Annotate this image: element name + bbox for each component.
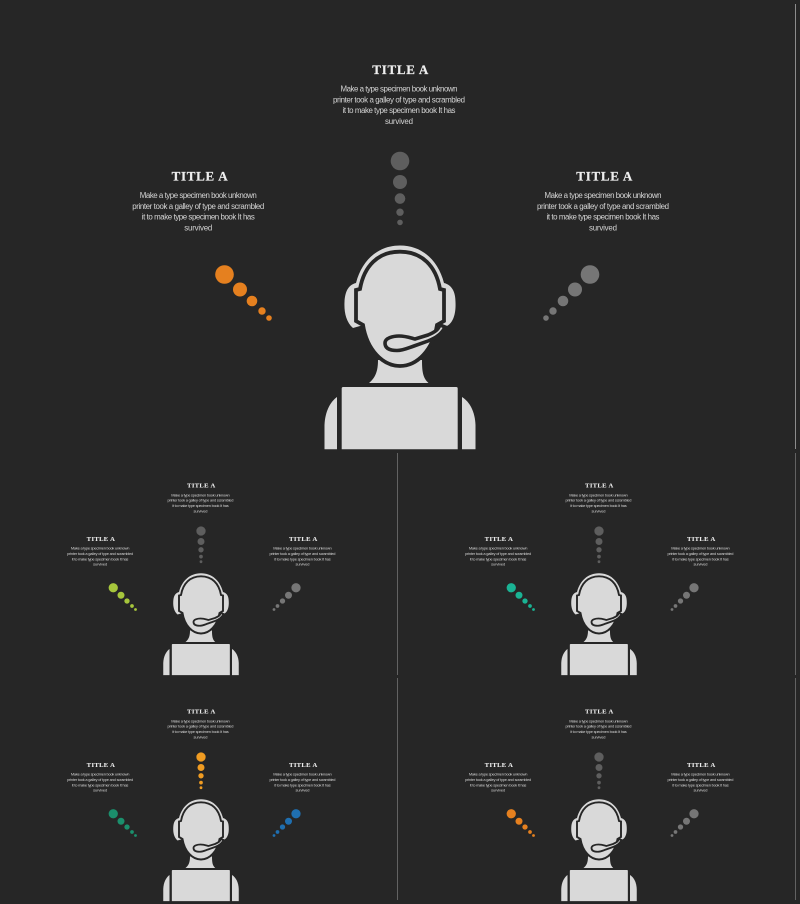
callout: left: printer took a galley of type and scrambled — [132, 202, 264, 211]
callout: top: TITLE A — [585, 708, 613, 716]
callout: top: printer took a galley of type and scrambled — [333, 95, 465, 104]
callout: top: survived — [194, 508, 208, 513]
callout: top: it to make type specimen book It has — [570, 729, 627, 734]
callout: top: Make a type specimen book unknown — [171, 492, 230, 497]
callout: right: TITLE A — [687, 762, 715, 769]
callout: right: it to make type specimen book It has — [274, 782, 331, 787]
callout: top — [566, 708, 632, 739]
callout: top — [168, 708, 234, 739]
callout: right: survived — [589, 224, 617, 232]
panel: main scene — [132, 62, 669, 449]
callout: right: TITLE A — [289, 762, 317, 769]
callout: top: TITLE A — [187, 482, 215, 490]
callout: top: it to make type specimen book It has — [172, 729, 229, 734]
callout: top: printer took a galley of type and scrambled — [566, 724, 632, 729]
dots: right grey — [671, 809, 699, 837]
callout: top: TITLE A — [372, 62, 429, 77]
callout: right: printer took a galley of type and scrambled — [537, 202, 669, 211]
dots: right grey — [671, 583, 699, 611]
callout: right: Make a type specimen book unknown — [544, 191, 662, 200]
dots: right grey — [273, 583, 301, 611]
icon: agent with headset — [324, 246, 476, 449]
panel: scene orange — [465, 708, 734, 901]
callout: top — [333, 62, 465, 126]
callout: top: printer took a galley of type and scrambled — [168, 724, 234, 729]
callout: right: survived — [694, 562, 708, 567]
callout: top: survived — [385, 117, 413, 126]
callout: left: TITLE A — [485, 536, 513, 543]
callout: top — [168, 482, 234, 513]
callout: right: it to make type specimen book It has — [672, 782, 729, 787]
callout: right: survived — [694, 788, 708, 793]
callout: left: survived — [93, 788, 107, 793]
callout: left: Make a type specimen book unknown — [71, 772, 129, 777]
dots: left orange — [507, 809, 535, 837]
callout: right — [668, 762, 734, 793]
callout: right: printer took a galley of type and scrambled — [668, 551, 734, 556]
callout: right: TITLE A — [687, 536, 715, 543]
panel: scene multicolour — [67, 708, 336, 901]
callout: top: TITLE A — [585, 482, 613, 490]
callout: top: Make a type specimen book unknown — [340, 84, 458, 94]
callout: right: survived — [296, 788, 310, 793]
callout: right: Make a type specimen book unknown — [671, 546, 730, 551]
callout: top: it to make type specimen book It has — [570, 503, 627, 508]
icon: agent with headset — [561, 573, 637, 675]
callout: right: survived — [296, 562, 310, 567]
callout: left: TITLE A — [87, 762, 115, 769]
dots: left green — [109, 809, 137, 837]
callout: right: TITLE A — [289, 536, 317, 543]
callout: left — [67, 536, 133, 567]
icon: agent with headset — [561, 799, 637, 901]
callout: right — [270, 762, 336, 793]
callout: top: it to make type specimen book It has — [342, 106, 456, 115]
icon: agent with headset — [163, 573, 239, 675]
icon: agent with headset — [163, 799, 239, 901]
panel: scene lime — [67, 482, 336, 675]
dots: top grey — [594, 526, 604, 563]
callout: right: Make a type specimen book unknown — [273, 546, 332, 551]
callout: top: TITLE A — [187, 708, 215, 716]
callout: left: printer took a galley of type and scrambled — [465, 777, 531, 782]
callout: top: printer took a galley of type and scrambled — [168, 498, 234, 503]
dots: left lime — [109, 583, 137, 611]
callout: right: it to make type specimen book It has — [274, 556, 331, 561]
callout: left: survived — [491, 562, 505, 567]
callout: left: survived — [491, 788, 505, 793]
callout: right: it to make type specimen book It has — [672, 556, 729, 561]
dots: top grey — [594, 752, 604, 789]
callout: right: TITLE A — [576, 169, 633, 184]
callout: right — [270, 536, 336, 567]
callout: top: Make a type specimen book unknown — [569, 492, 628, 497]
dots: left orange — [215, 265, 272, 321]
callout: top: it to make type specimen book It has — [172, 503, 229, 508]
callout: left: survived — [184, 224, 212, 232]
callout: top: Make a type specimen book unknown — [569, 718, 628, 723]
callout: left — [67, 762, 133, 793]
callout: right: Make a type specimen book unknown — [671, 772, 730, 777]
callout: right — [537, 169, 669, 232]
dots: right blue — [273, 809, 301, 837]
panel: scene teal — [465, 482, 734, 675]
callout: left: it to make type specimen book It has — [470, 556, 526, 561]
callout: left: printer took a galley of type and scrambled — [67, 777, 133, 782]
callout: left: it to make type specimen book It has — [470, 782, 526, 787]
callout: top: printer took a galley of type and scrambled — [566, 498, 632, 503]
callout: left: it to make type specimen book It has — [72, 782, 128, 787]
callout: left — [465, 762, 531, 793]
callout: top: survived — [592, 508, 606, 513]
callout: left: it to make type specimen book It has — [142, 213, 255, 222]
callout: left — [132, 169, 264, 232]
callout: left: Make a type specimen book unknown — [140, 191, 257, 200]
callout: left: TITLE A — [87, 536, 115, 543]
dots: top grey — [196, 526, 206, 563]
callout: left: it to make type specimen book It has — [72, 556, 128, 561]
callout: right: Make a type specimen book unknown — [273, 772, 332, 777]
callout: right: printer took a galley of type and scrambled — [270, 777, 336, 782]
callout: left: survived — [93, 562, 107, 567]
dots: top amber — [196, 752, 206, 789]
callout: left: printer took a galley of type and scrambled — [67, 551, 133, 556]
callout: top: Make a type specimen book unknown — [171, 718, 230, 723]
callout: right — [668, 536, 734, 567]
callout: left: Make a type specimen book unknown — [469, 772, 527, 777]
callout: right: it to make type specimen book It has — [546, 213, 660, 222]
callout: left: TITLE A — [172, 169, 228, 184]
callout: top — [566, 482, 632, 513]
dots: right grey — [543, 265, 599, 321]
callout: left: printer took a galley of type and scrambled — [465, 551, 531, 556]
callout: left: TITLE A — [485, 762, 513, 769]
callout: left: Make a type specimen book unknown — [71, 546, 129, 551]
callout: left — [465, 536, 531, 567]
dots: left teal — [507, 583, 535, 611]
dots: top grey — [391, 152, 409, 225]
callout: right: printer took a galley of type and scrambled — [270, 551, 336, 556]
callout: right: printer took a galley of type and scrambled — [668, 777, 734, 782]
callout: top: survived — [592, 734, 606, 739]
callout: left: Make a type specimen book unknown — [469, 546, 527, 551]
callout: top: survived — [194, 734, 208, 739]
